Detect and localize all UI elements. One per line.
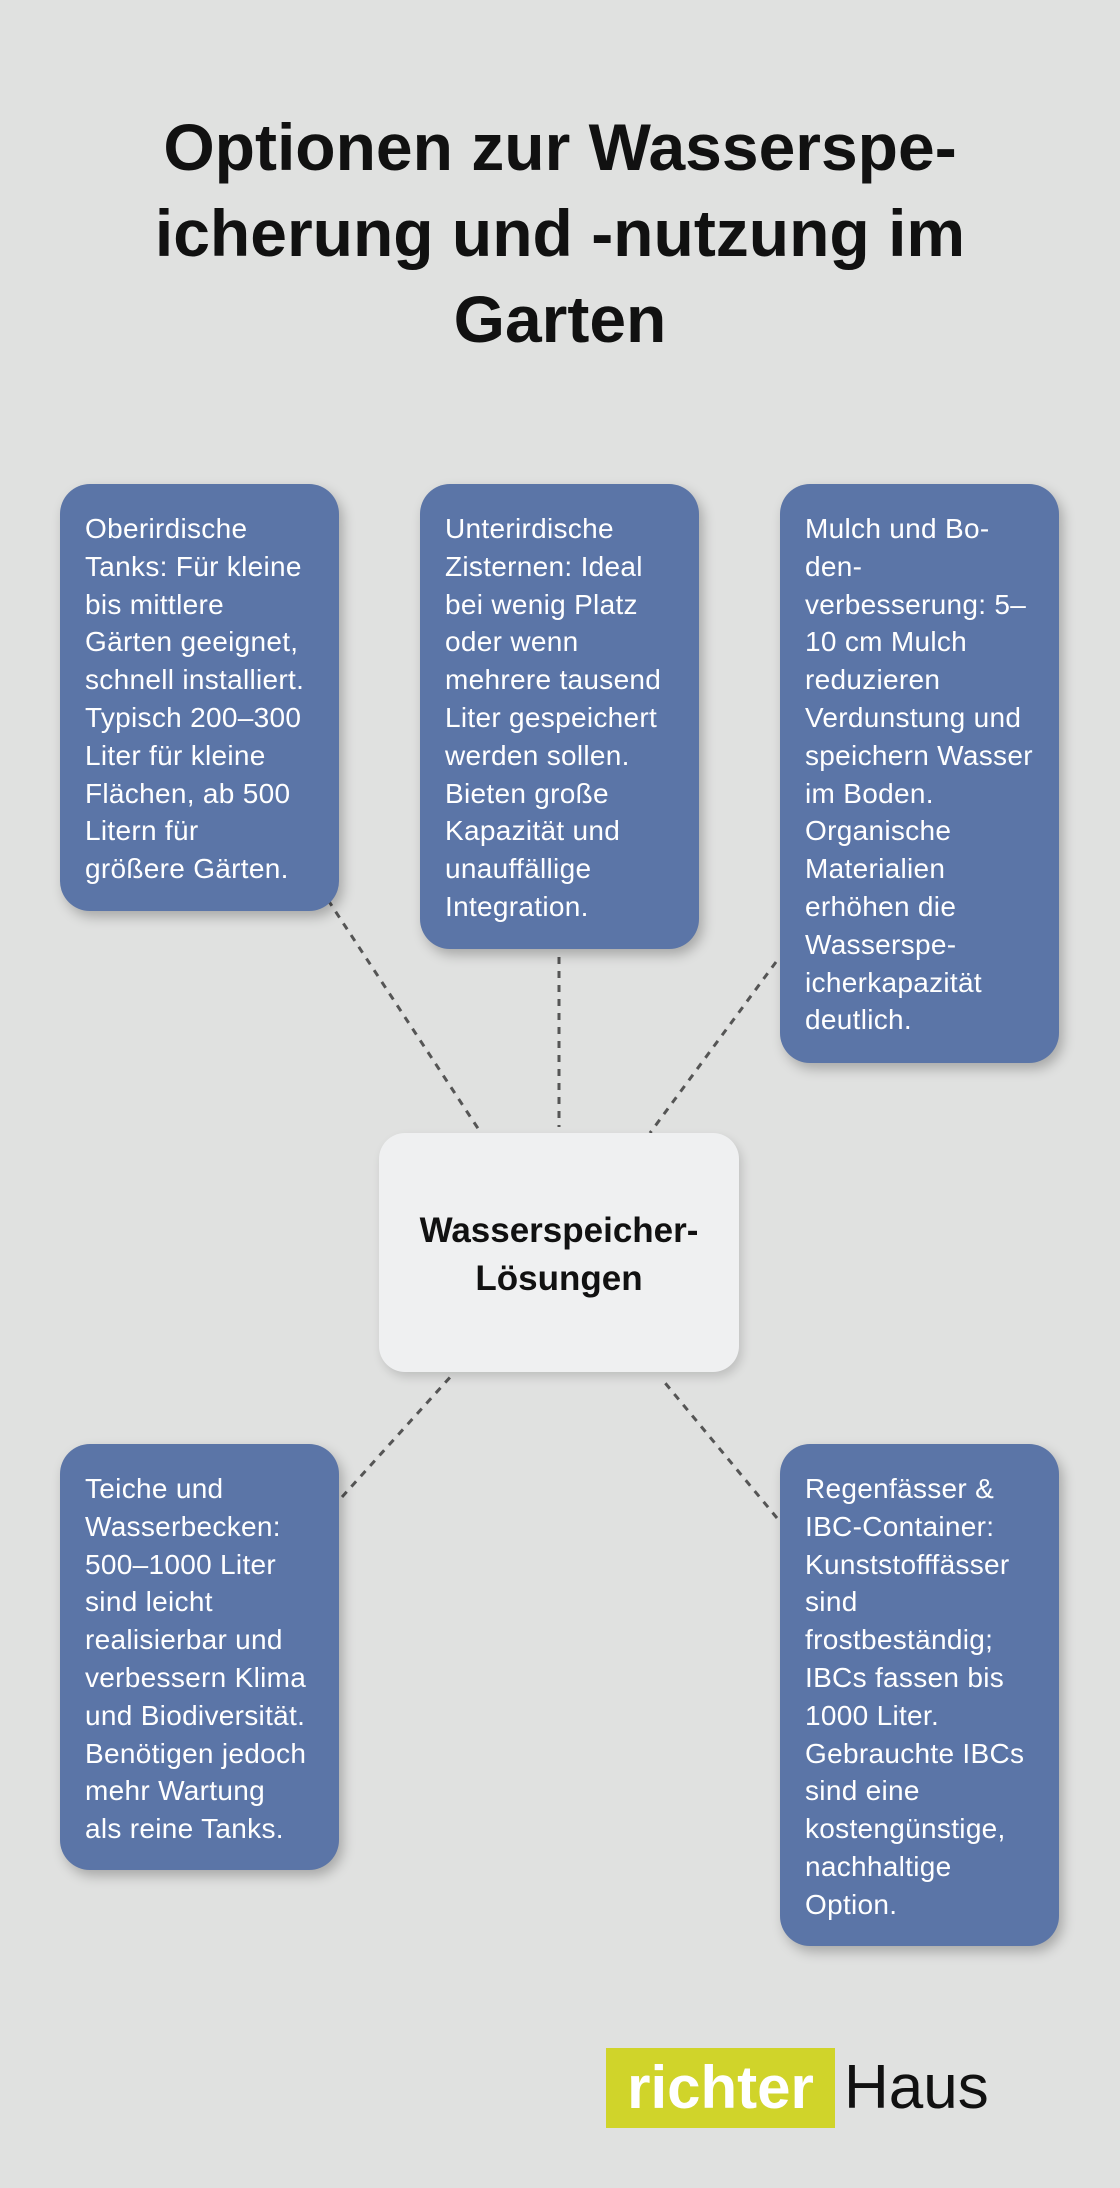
panel: Teiche: verbessern Klima (85, 1662, 306, 1693)
panel: Regenfässer: IBC-Container: (805, 1511, 994, 1542)
logo: richter (627, 2054, 814, 2121)
panel: Regenfässer: Option. (805, 1889, 897, 1920)
panel: Mulch: Materialien (805, 853, 945, 884)
panel: Regenfässer: Kunststofffässer (805, 1549, 1010, 1580)
panel: oberirdische Tanks: Litern für (85, 815, 198, 846)
panel: Teiche (60, 1444, 339, 1870)
panel: Teiche: sind leicht (85, 1586, 213, 1617)
panel: Regenfässer: IBCs fassen bis (805, 1662, 1004, 1693)
panel: Mulch: verbesserung: 5– (805, 589, 1026, 620)
panel: Regenfässer: Regenfässer & (805, 1473, 994, 1504)
title: Optionen zur Wasserspe- (163, 110, 957, 184)
panel: Regenfässer: frostbeständig; (805, 1624, 993, 1655)
panel: oberirdische Tanks: Gärten geeignet, (85, 626, 298, 657)
panel: Mulch: den- (805, 551, 862, 582)
panel: Teiche: und Biodiversität. (85, 1700, 305, 1731)
panel: Mulch: 10 cm Mulch (805, 626, 967, 657)
panel: Regenfässer: sind eine (805, 1775, 920, 1806)
panel: unterirdische Zisternen (420, 484, 699, 949)
panel: Teiche: realisierbar und (85, 1624, 283, 1655)
panel: Regenfässer: kostengünstige, (805, 1813, 1006, 1844)
panel: Mulch: Mulch und Bo- (805, 513, 989, 544)
panel: Regenfässer: Gebrauchte IBCs (805, 1738, 1024, 1769)
panel: Regenfässer (780, 1444, 1059, 1946)
panel: Mulch: deutlich. (805, 1004, 912, 1035)
panel: Regenfässer: nachhaltige (805, 1851, 952, 1882)
panel: unterirdische Zisternen: mehrere tausend (445, 664, 661, 695)
panel: oberirdische Tanks: schnell installiert. (85, 664, 304, 695)
panel: Mulch: im Boden. (805, 778, 934, 809)
panel: Teiche: Teiche und (85, 1473, 223, 1504)
panel: Teiche: Wasserbecken: (85, 1511, 281, 1542)
center node (379, 1133, 739, 1372)
title: Garten (454, 282, 666, 356)
center node: Wasserspeicher- (420, 1210, 698, 1250)
panel: unterirdische Zisternen: Bieten große (445, 778, 609, 809)
panel: Mulch: speichern Wasser (805, 740, 1033, 771)
title: icherung und -nutzung im (155, 196, 965, 270)
logo: Haus (844, 2053, 989, 2122)
panel: Teiche: 500–1000 Liter (85, 1549, 276, 1580)
panel: unterirdische Zisternen: Integration. (445, 891, 589, 922)
panel: oberirdische Tanks: größere Gärten. (85, 853, 289, 884)
panel: Mulch: erhöhen die (805, 891, 956, 922)
panel: oberirdische Tanks: Liter für kleine (85, 740, 266, 771)
panel: Mulch: Verdunstung und (805, 702, 1021, 733)
title (155, 110, 965, 356)
center node: Lösungen (475, 1258, 643, 1298)
panel: Mulch: reduzieren (805, 664, 940, 695)
panel: unterirdische Zisternen: bei wenig Platz (445, 589, 638, 620)
panel: Teiche: als reine Tanks. (85, 1813, 284, 1844)
panel: Mulch: icherkapazität (805, 967, 982, 998)
panel: oberirdische Tanks: Tanks: Für kleine (85, 551, 302, 582)
panel: Mulch (780, 484, 1059, 1063)
panel: unterirdische Zisternen: Unterirdische (445, 513, 614, 544)
logo (606, 2048, 989, 2128)
panel: oberirdische Tanks: Typisch 200–300 (85, 702, 301, 733)
panel: unterirdische Zisternen: werden sollen. (445, 740, 630, 771)
panel: unterirdische Zisternen: oder wenn (445, 626, 578, 657)
panel: Teiche: Benötigen jedoch (85, 1738, 306, 1769)
panel: oberirdische Tanks: bis mittlere (85, 589, 224, 620)
panel: oberirdische Tanks: Oberirdische (85, 513, 247, 544)
panel: unterirdische Zisternen: Zisternen: Ideal (445, 551, 643, 582)
panel: Mulch: Organische (805, 815, 951, 846)
panel: oberirdische Tanks: Flächen, ab 500 (85, 778, 290, 809)
panel: unterirdische Zisternen: Liter gespeichert (445, 702, 657, 733)
panel: unterirdische Zisternen: unauffällige (445, 853, 591, 884)
panel: oberirdische Tanks (60, 484, 339, 911)
panel: Mulch: Wasserspe- (805, 929, 956, 960)
panel: Teiche: mehr Wartung (85, 1775, 265, 1806)
panel: Regenfässer: sind (805, 1586, 858, 1617)
panel: Regenfässer: 1000 Liter. (805, 1700, 939, 1731)
panel: unterirdische Zisternen: Kapazität und (445, 815, 620, 846)
